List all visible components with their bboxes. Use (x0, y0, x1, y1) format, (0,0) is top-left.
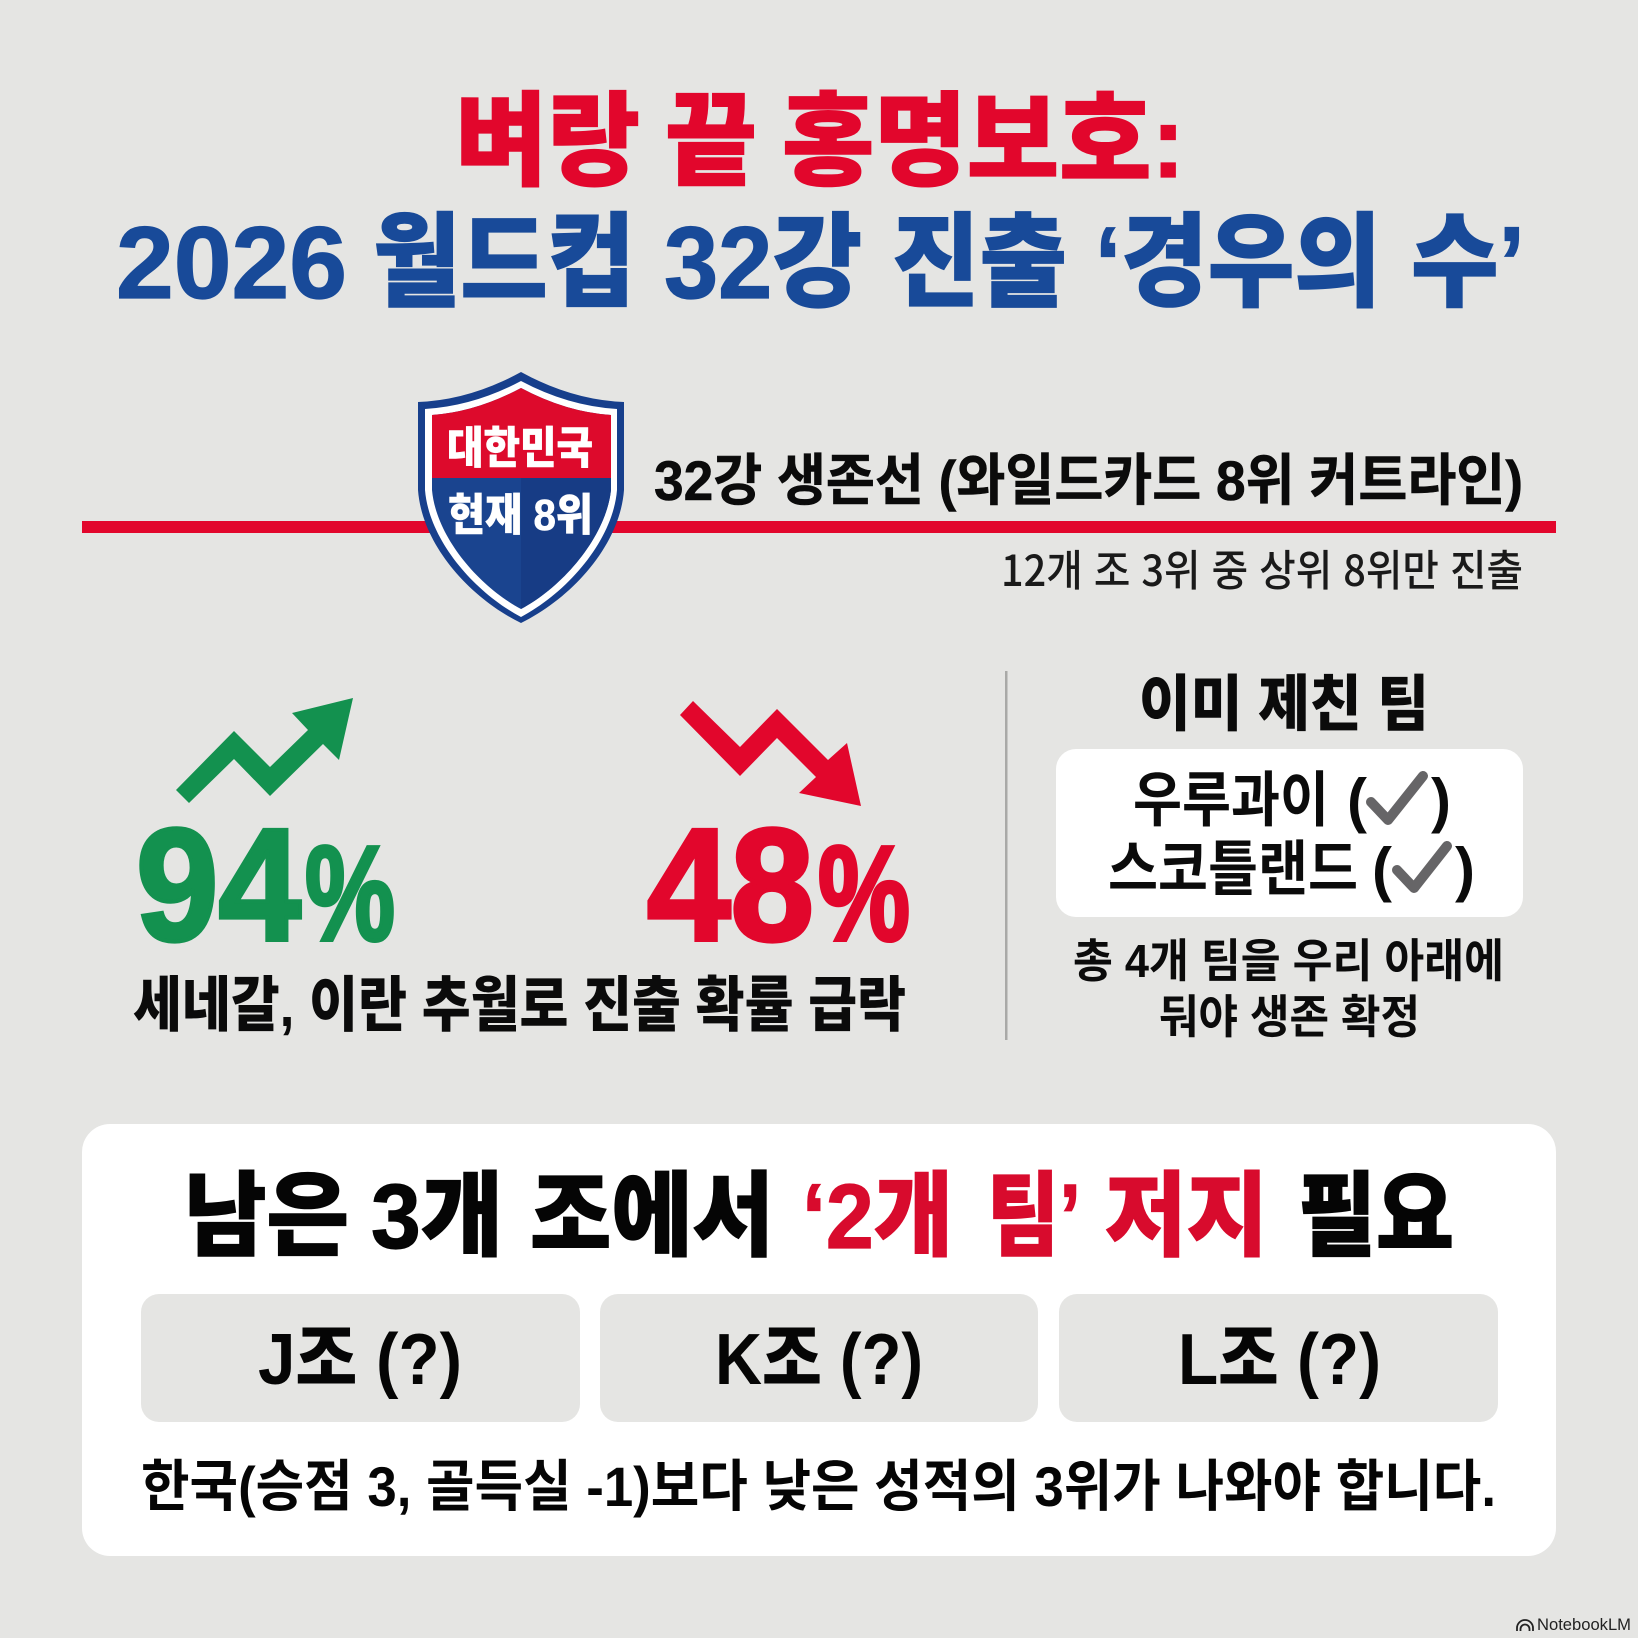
panel: remaining groups (82, 1124, 1556, 1556)
title line 2: 진출 (892, 206, 1067, 320)
shield text bottom: 현재 8위 (448, 491, 593, 540)
team: Scotland: ( (1372, 836, 1392, 903)
caption: 세네갈, 이란 추월로 진출 확률 급락 (133, 972, 906, 1039)
stat: 48 percent: % (818, 818, 910, 969)
team: Uruguay (1133, 767, 1451, 834)
icon: check (1371, 776, 1423, 820)
title line 2: 월드컵 (373, 206, 635, 320)
title line 1 (455, 85, 1185, 199)
team: Scotland: 스코틀랜드 (1108, 836, 1358, 903)
heading: 이미 제친 팀 (1139, 670, 1429, 738)
title line 2: ‘경우의 (1095, 206, 1381, 320)
group L (1059, 1294, 1498, 1422)
cutoff line (82, 521, 1556, 533)
stat: 94 percent: % (305, 818, 395, 969)
icon: notebook arcs (1517, 1620, 1533, 1631)
condition sentence: 한국(승점 3, 골득실 -1)보다 낮은 성적의 3위가 나와야 합니다. (141, 1455, 1496, 1518)
brand name: NotebookLM (1537, 1616, 1631, 1634)
title line 1: 끝 (665, 85, 757, 199)
icon: green rising arrow (176, 698, 353, 803)
panel heading (184, 1166, 1454, 1268)
shield badge (418, 372, 624, 623)
panel heading: 팀’ (987, 1166, 1081, 1268)
title line 2: 2026 (116, 206, 347, 320)
stat: 48 percent: 48 (647, 795, 814, 974)
stat: 48 percent (647, 795, 910, 974)
icon: check (1397, 846, 1447, 888)
title line 1: 벼랑 (455, 85, 640, 199)
panel heading: 조에서 (530, 1166, 774, 1268)
team: Scotland: ) (1455, 836, 1475, 903)
panel heading: 저지 (1105, 1166, 1268, 1268)
group J: J조 (?) (258, 1320, 462, 1400)
divider (1005, 671, 1008, 1040)
title line 2: 32강 (664, 206, 862, 320)
panel heading: ‘2개 (802, 1166, 953, 1268)
cutoff subtext: 12개 조 3위 중 상위 8위만 진출 (1001, 537, 1523, 599)
panel: already overtaken teams (1056, 670, 1523, 1043)
team: Uruguay: 우루과이 (1133, 767, 1329, 834)
white card (1056, 749, 1523, 917)
panel: probability drop (133, 698, 910, 1039)
title (116, 85, 1525, 320)
note line 1: 총 4개 팀을 우리 아래에 (1073, 935, 1504, 987)
title line 2: 수’ (1411, 206, 1525, 320)
panel heading: 필요 (1298, 1166, 1454, 1268)
title line 2 (116, 206, 1525, 320)
panel heading: 3개 (371, 1166, 503, 1268)
team: Uruguay: ) (1431, 767, 1451, 834)
title line 1: 홍명보호: (782, 85, 1185, 199)
stat: 94 percent (136, 795, 395, 974)
group L: L조 (?) (1178, 1320, 1381, 1400)
note line 2: 둬야 생존 확정 (1159, 991, 1420, 1043)
cutoff heading: 32강 생존선 (와일드카드 8위 커트라인) (654, 449, 1523, 512)
watermark (1517, 1616, 1631, 1634)
shield text top: 대한민국 (447, 424, 593, 473)
stat: 94 percent: 94 (136, 795, 301, 974)
group K (600, 1294, 1038, 1422)
group J (141, 1294, 580, 1422)
team: Uruguay: ( (1347, 767, 1367, 834)
icon: red falling arrow (680, 701, 861, 806)
panel heading: 남은 (184, 1166, 349, 1268)
group K: K조 (?) (715, 1320, 923, 1400)
